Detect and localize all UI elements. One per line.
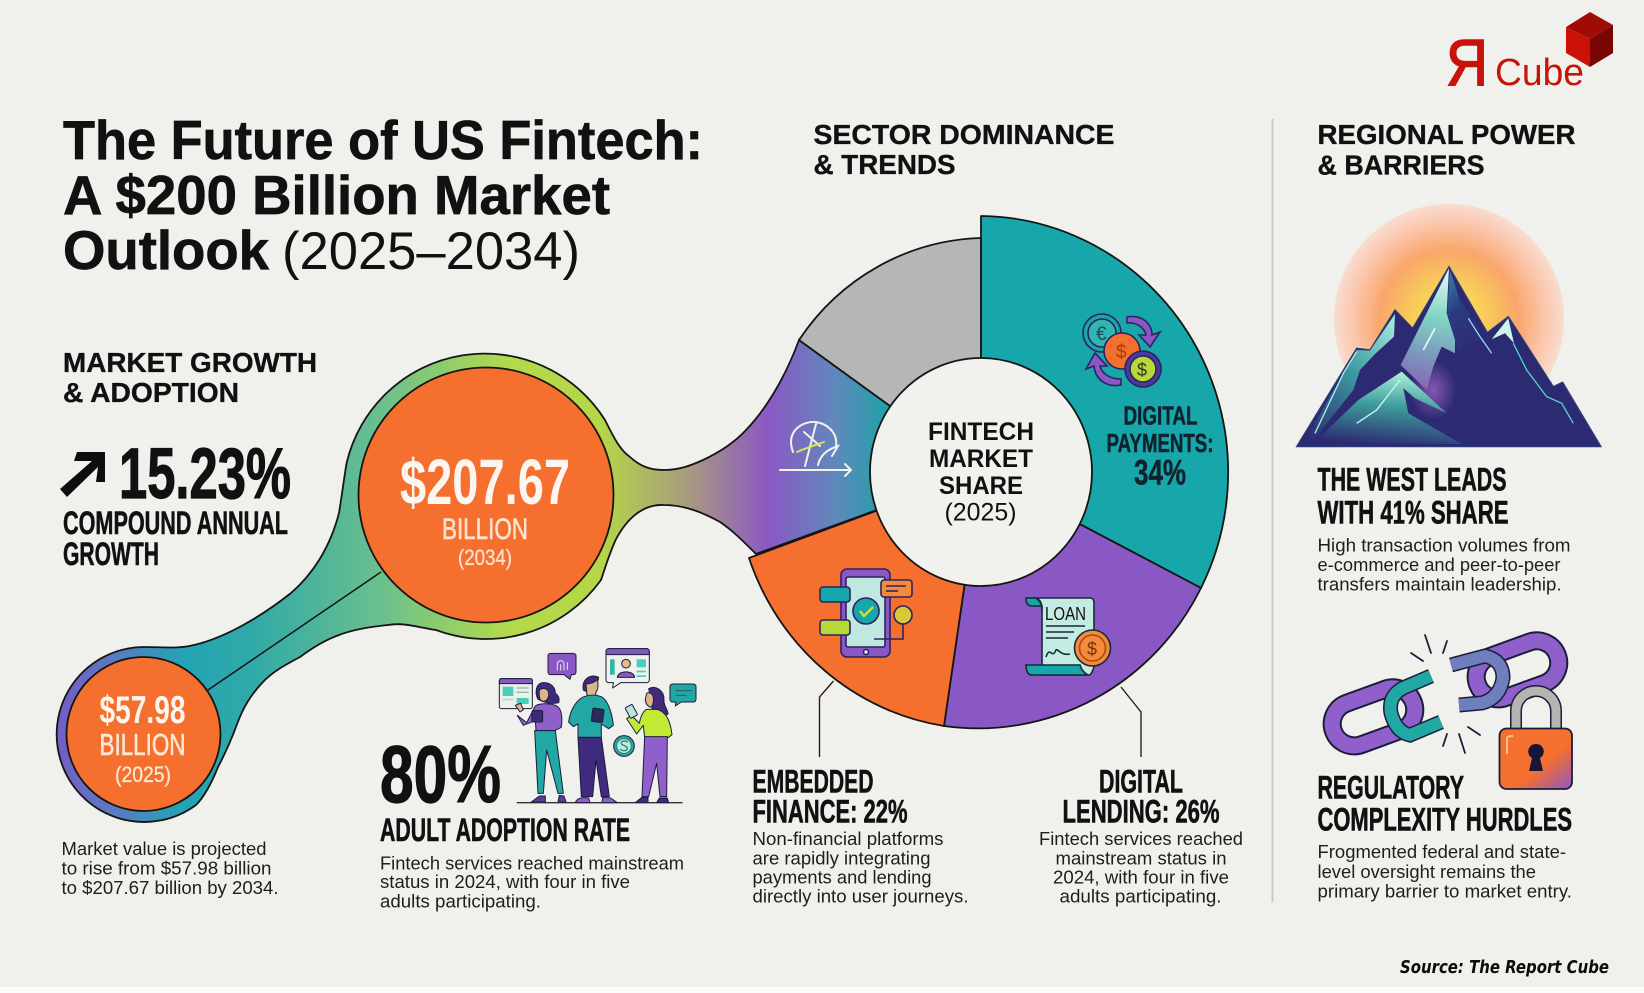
donut centre: MARKET [929,445,1033,473]
heading: sector dominance [814,119,1114,180]
text block: west leads: High transaction volumes from [1318,536,1570,556]
heading: market growth: MARKET GROWTH [63,347,317,378]
circle: 2034 value: $207.67 [400,446,570,518]
callout: digital lending [1039,764,1243,906]
text: market value note: to rise from $57.98 billion [62,858,272,878]
text block: regulatory hurdles: level oversight remains the [1318,862,1536,882]
callout: embedded finance: are rapidly integrating [752,848,930,868]
heading: market growth: & ADOPTION [63,377,239,408]
leader line: embedded finance [820,681,834,757]
icon: mountain [1297,267,1601,447]
icon: sun glow [1334,204,1564,434]
logo wordmark [1446,26,1584,100]
heading: sector dominance: & TRENDS [814,149,956,180]
icon: video call bubble [606,649,649,688]
stat: CAGR: COMPOUND ANNUAL [63,505,288,541]
icon: currency exchange coins: $ [1137,360,1147,380]
callout: digital lending: DIGITAL [1099,764,1183,800]
circle: 2025 value: (2025) [115,762,171,787]
stat: CAGR: GROWTH [63,536,159,572]
text block: regulatory hurdles [1318,770,1572,902]
callout: digital lending: LENDING: 26% [1062,794,1220,830]
icon: currency exchange coins: $ [1116,342,1127,363]
icon: dollar coin [614,736,634,756]
heading: regional power [1318,119,1576,180]
heading: sector dominance: SECTOR DOMINANCE [814,119,1114,150]
icon: loan document: LOAN [1045,604,1086,624]
text: market value note: Market value is projected [62,839,266,859]
text: market value note: to $207.67 billion by 2034. [62,878,278,898]
icon: currency exchange coins: € [1096,324,1107,345]
icon: purple chat bubble [548,653,576,679]
right chain link [1451,635,1565,705]
segment: other (gray) [799,238,981,472]
circle: 2025 value [66,657,220,811]
donut centre: FINTECH [928,418,1034,446]
icon: teal chat bubble [670,684,696,706]
title: Outlook [63,219,269,281]
callout: digital lending: 2024, with four in five [1053,868,1229,888]
heading: regional power: & BARRIERS [1318,150,1484,180]
left chain link [1326,676,1441,752]
label: digital payments: DIGITAL [1124,400,1198,430]
label: digital payments [1106,400,1214,492]
icon: growth arrow [60,452,105,497]
circle: 2025 value: $57.98 [100,689,186,732]
callout: embedded finance: EMBEDDED [752,764,874,800]
donut centre [870,358,1092,586]
padlock [1500,691,1572,789]
title [63,109,703,281]
text: market value note [62,839,278,898]
label: digital payments: PAYMENTS: [1106,428,1214,458]
icon: fintech globe with arrow [780,422,851,476]
icon: broken chain and padlock [1326,635,1572,789]
text block: west leads: e-commerce and peer-to-peer [1318,555,1561,575]
stat: adoption: status in 2024, with four in five [380,872,630,892]
stat: adoption [380,730,684,912]
stat: CAGR: 15.23% [119,435,291,514]
text block: regulatory hurdles: REGULATORY [1318,770,1464,806]
stat: CAGR [60,435,291,572]
callout: digital lending: adults participating. [1060,886,1222,906]
segment: digital lending [944,472,1201,728]
ground line [517,801,682,805]
break sparks [1411,635,1480,753]
stat: adoption: adults participating. [380,892,541,912]
donut centre: SHARE [939,472,1023,500]
donut centre: (2025) [944,498,1016,526]
divider [1272,119,1274,902]
icon: currency exchange coins [1083,314,1161,387]
circle: 2034 value [358,368,614,622]
illustration: people with devices [499,649,696,803]
segment: embedded finance [749,472,981,726]
leader line: digital lending [1121,687,1141,757]
circle: 2025 value: BILLION [100,727,186,762]
figure: woman with phone [625,687,672,803]
donut chart: fintech market share [749,216,1228,728]
callout: embedded finance [752,764,968,906]
icon: red cube [1566,12,1613,67]
stat: adoption: ADULT ADOPTION RATE [380,812,630,848]
title: A $200 Billion Market [63,164,610,226]
text block: west leads: transfers maintain leadership. [1318,574,1562,594]
text block: west leads: WITH 41% SHARE [1318,494,1508,530]
figure: man with tablet [569,676,617,803]
figure: woman with tablet [515,683,566,802]
connector flow shape [57,340,981,822]
segment: digital payments [981,216,1228,588]
logo wordmark: Я [1446,26,1488,100]
callout: digital lending: mainstream status in [1056,848,1226,868]
icon: loan document: $ [1087,639,1097,659]
text block: regulatory hurdles: primary barrier to market entry. [1318,882,1572,902]
callout: embedded finance: directly into user journeys. [752,886,968,906]
logo wordmark: Cube [1495,52,1584,94]
callout: embedded finance: Non-financial platforms [752,829,944,849]
callout: embedded finance: payments and lending [752,868,932,888]
stat: adoption: 80% [380,730,501,820]
label: digital payments: 34% [1134,454,1186,492]
text block: regulatory hurdles: Frogmented federal and state- [1318,842,1566,862]
circle: 2034 value: (2034) [458,545,512,570]
callout: embedded finance: FINANCE: 22% [752,794,908,830]
text block: west leads: THE WEST LEADS [1318,462,1506,498]
circle: 2034 value: BILLION [442,513,528,546]
callout: digital lending: Fintech services reached [1039,829,1243,849]
title: The Future of US Fintech: [63,109,703,171]
connector inner line [208,572,381,690]
stat: adoption: Fintech services reached mainstream [380,854,684,874]
heading: regional power: REGIONAL POWER [1318,119,1576,150]
title: (2025–2034) [282,222,580,281]
icon: browser card [499,679,532,709]
icon: phone with embedded apps [820,569,912,657]
icon: loan document [1026,598,1110,675]
logo: RCube [1446,12,1613,100]
text block: west leads [1318,462,1570,594]
heading: market growth [63,347,317,408]
